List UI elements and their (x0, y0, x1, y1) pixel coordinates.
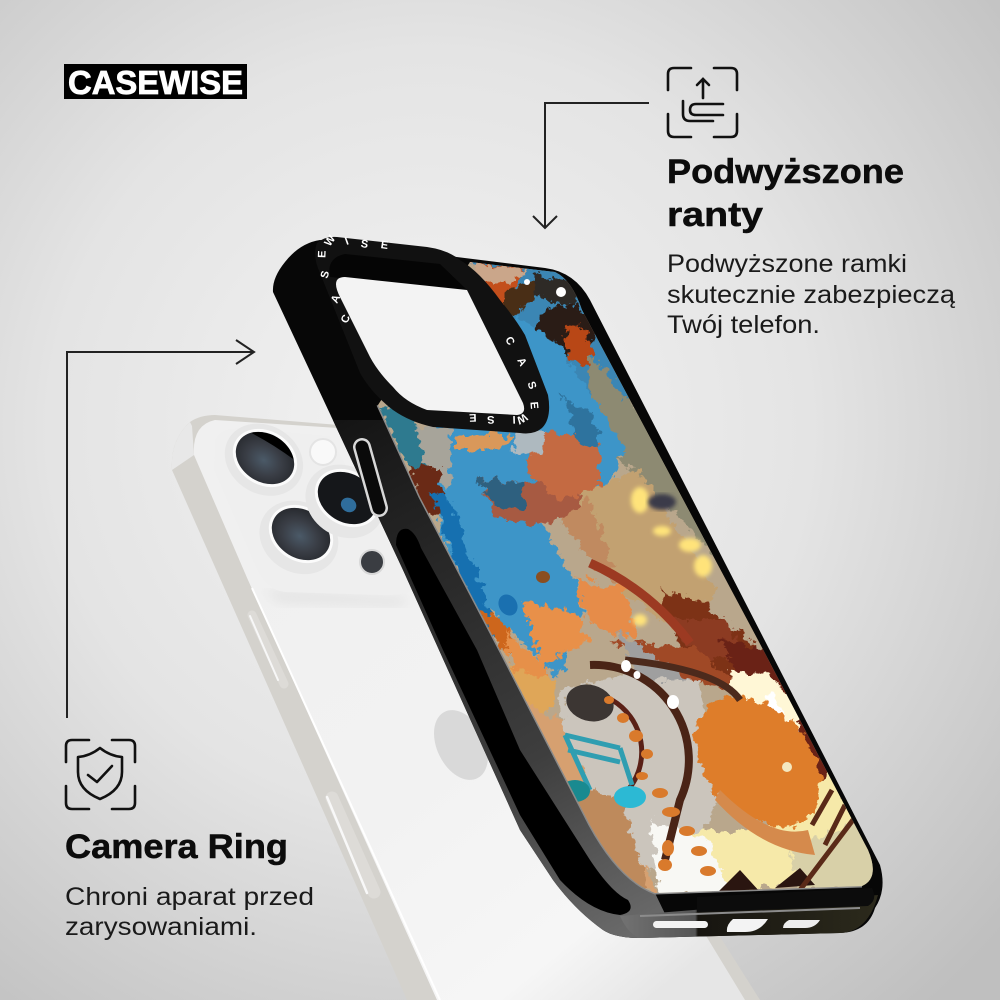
art: dark red-brown (660, 590, 760, 690)
art: deep blue strip (430, 490, 495, 640)
text: camera ring description (65, 883, 314, 941)
camera cutout window (336, 277, 524, 415)
heading: raised edges: Podwyższone (667, 153, 904, 191)
lip highlight (640, 908, 860, 916)
bottom wall (620, 895, 878, 938)
bottom port: usb (727, 919, 768, 932)
camera plateau shadow (262, 590, 410, 606)
text: raised edges description: Twój telefon. (667, 311, 820, 339)
lens: bottom (246, 486, 352, 589)
art: red arc (590, 563, 690, 643)
art: orange patches (575, 578, 640, 640)
icon: raised edges (668, 68, 737, 137)
art: rust wedge (408, 465, 442, 515)
art: dark blue rust smear (480, 480, 590, 525)
side button lower (327, 797, 374, 893)
art: music note teal (565, 735, 632, 790)
art: blue patch above (563, 397, 600, 448)
bottom port: speaker right (783, 920, 820, 928)
art: tan lower left (520, 700, 660, 895)
text: raised edges description (667, 250, 955, 339)
art base (378, 262, 873, 893)
art: main blue wash (430, 315, 625, 680)
text: raised edges description: skutecznie zabezpieczą (667, 281, 955, 309)
inner highlight line (252, 588, 440, 1000)
art: cream lower right (692, 772, 852, 890)
icon: apple logo (423, 701, 499, 789)
black groove (396, 529, 631, 915)
icon: shield (66, 740, 135, 809)
top-left bevel (172, 422, 194, 470)
bezel highlight (378, 405, 862, 893)
white phone (172, 409, 760, 1000)
ring wordmark upper: CASEWISE (316, 233, 389, 325)
art: orange blob wash (715, 790, 815, 855)
art: dark spot (648, 494, 676, 510)
bottom lip (697, 888, 874, 912)
side button upper (250, 615, 284, 684)
case outer shell (273, 240, 883, 938)
phone back surface (194, 420, 745, 1000)
side button (362, 447, 379, 508)
art: orange dabs (604, 696, 716, 876)
art: brown dot (536, 571, 550, 583)
printed artwork (378, 262, 873, 893)
flash (310, 439, 336, 465)
art: top region (470, 262, 629, 402)
phone side band (172, 415, 760, 1000)
arrow: raised edges (533, 103, 649, 228)
arrow: camera ring (67, 340, 254, 718)
art: cream splash (728, 670, 800, 735)
protective case (273, 233, 900, 945)
art: rust scrape (525, 430, 600, 500)
art: dark marks at bottom (718, 868, 815, 892)
art: dark stripes lower right (798, 788, 854, 888)
art: blue dot (498, 594, 518, 616)
art: teal corner (380, 406, 428, 470)
text: camera ring description: Chroni aparat przed (65, 883, 314, 911)
sensor (360, 550, 384, 574)
heading: camera ring: Camera Ring (65, 828, 288, 866)
art: pale strip (415, 425, 450, 490)
camera ring (315, 237, 549, 433)
art: yellow gleams (631, 487, 712, 626)
ring wordmark lower: CASEWISE (469, 335, 540, 426)
art: white dots (524, 279, 792, 772)
ring inner wall (329, 254, 467, 290)
camera plateau (214, 428, 415, 595)
art: lower mid grey field (560, 670, 720, 880)
lens: right (292, 450, 398, 553)
heading: raised edges (667, 153, 904, 234)
art: big orange blob (692, 694, 824, 830)
art: clock rings (590, 665, 689, 860)
text: camera ring description: zarysowaniami. (65, 913, 257, 941)
text: raised edges description: Podwyższone ramki (667, 250, 907, 278)
art: dark clock dab (566, 684, 614, 722)
logo: CASEWISE (68, 64, 243, 101)
bottom port: speaker left (653, 921, 708, 928)
lens: top (211, 409, 317, 510)
heading: raised edges: ranty (667, 196, 763, 234)
case side wall (325, 420, 680, 945)
art: beige polygon (580, 470, 715, 640)
